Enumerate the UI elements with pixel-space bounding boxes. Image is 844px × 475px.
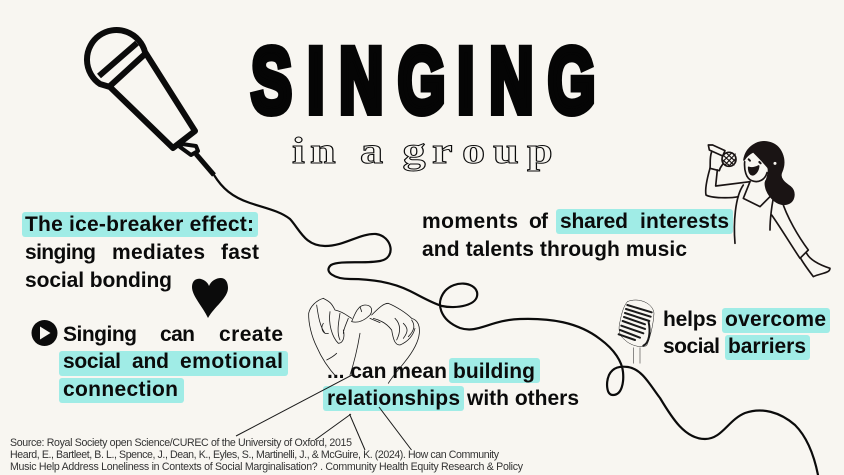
- panel: shared interests text: and talents through music: [422, 238, 687, 261]
- panel: overcome social barriers text: overcome: [725, 308, 826, 331]
- source text: Music Help Address Loneliness in Contexts of Social Marginalisation? . Community Health Equity Research & Policy: [10, 461, 524, 473]
- icon: retro microphone: [619, 300, 654, 363]
- icon: linked pinky hands: [309, 298, 419, 383]
- panel: social and emotional connection text: Singing: [63, 323, 137, 346]
- panel: social and emotional connection text: emotional: [180, 350, 283, 373]
- panel: building relationships text: relationships: [327, 387, 460, 410]
- panel: social and emotional connection text: create: [219, 323, 283, 346]
- icon: singing woman: [706, 142, 830, 277]
- panel: social and emotional connection text: [59, 323, 288, 403]
- source text: [10, 437, 524, 473]
- panel: ice-breaker text: mediates: [112, 241, 205, 264]
- panel: building relationships text: with others: [466, 387, 579, 410]
- panel: shared interests text: moments: [422, 210, 518, 233]
- icon: handheld microphone: [87, 30, 214, 175]
- panel: building relationships text: ... can mean: [327, 360, 447, 383]
- panel: ice-breaker text: singing: [25, 241, 96, 264]
- panel: overcome social barriers text: helps: [663, 308, 717, 331]
- panel: social and emotional connection text: and: [132, 350, 169, 373]
- icon: heart: [192, 278, 228, 318]
- title: SINGING: [251, 28, 595, 132]
- panel: overcome social barriers text: barriers: [728, 335, 806, 358]
- panel: building relationships text: building: [453, 360, 535, 383]
- panel: social and emotional connection text: social: [63, 350, 121, 373]
- icon: play button: [32, 320, 58, 346]
- panel: social and emotional connection text: can: [160, 323, 195, 346]
- source text: Source: Royal Society open Science/CUREC of the University of Oxford, 2015: [10, 437, 352, 449]
- microphone cable: [214, 175, 818, 475]
- panel: social and emotional connection text: connection: [63, 378, 178, 401]
- panel: overcome social barriers text: social: [663, 335, 720, 358]
- panel: building relationships text: [323, 358, 579, 411]
- panel: overcome social barriers text: [663, 308, 830, 360]
- subtitle: in a group: [292, 131, 553, 172]
- panel: ice-breaker text: social bonding: [25, 269, 172, 292]
- panel: ice-breaker text: [22, 212, 259, 292]
- connector lines from text to sources: [236, 375, 412, 450]
- panel: shared interests text: interests: [640, 210, 729, 233]
- panel: ice-breaker text: fast: [221, 241, 259, 264]
- panel: shared interests text: [422, 209, 733, 261]
- panel: shared interests text: of: [529, 210, 549, 233]
- panel: ice-breaker text: The ice-breaker effect:: [25, 213, 254, 236]
- source text: Heard, E., Bartleet, B. L., Spence, J., Dean, K., Eyles, S., Martinelli, J., & McGuire, K. (2024). How can Community: [10, 449, 500, 461]
- panel: shared interests text: shared: [560, 210, 628, 233]
